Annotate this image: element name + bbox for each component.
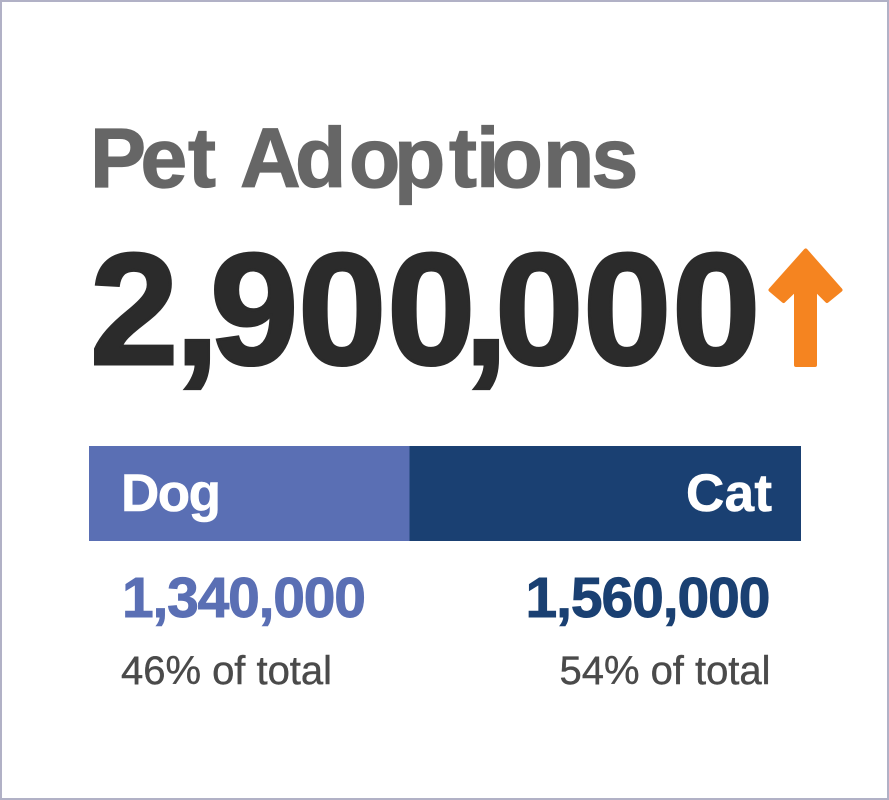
bar segment: cat [410, 446, 801, 541]
total number: 2,900,000 [90, 220, 760, 398]
cat stats [526, 566, 770, 693]
title: Pet Adoptions [90, 111, 638, 205]
bar label: cat: Cat [686, 464, 772, 523]
dog value: 1,340,000 [122, 566, 366, 630]
cat share: 54% of total [560, 649, 770, 693]
cat value: 1,560,000 [526, 566, 770, 630]
icon: orange up arrow [770, 250, 840, 365]
dog stats [121, 566, 366, 693]
dog share: 46% of total [121, 649, 332, 693]
bar segment: dog [89, 446, 410, 541]
split bar [89, 446, 801, 541]
bar label: dog: Dog [121, 464, 221, 523]
